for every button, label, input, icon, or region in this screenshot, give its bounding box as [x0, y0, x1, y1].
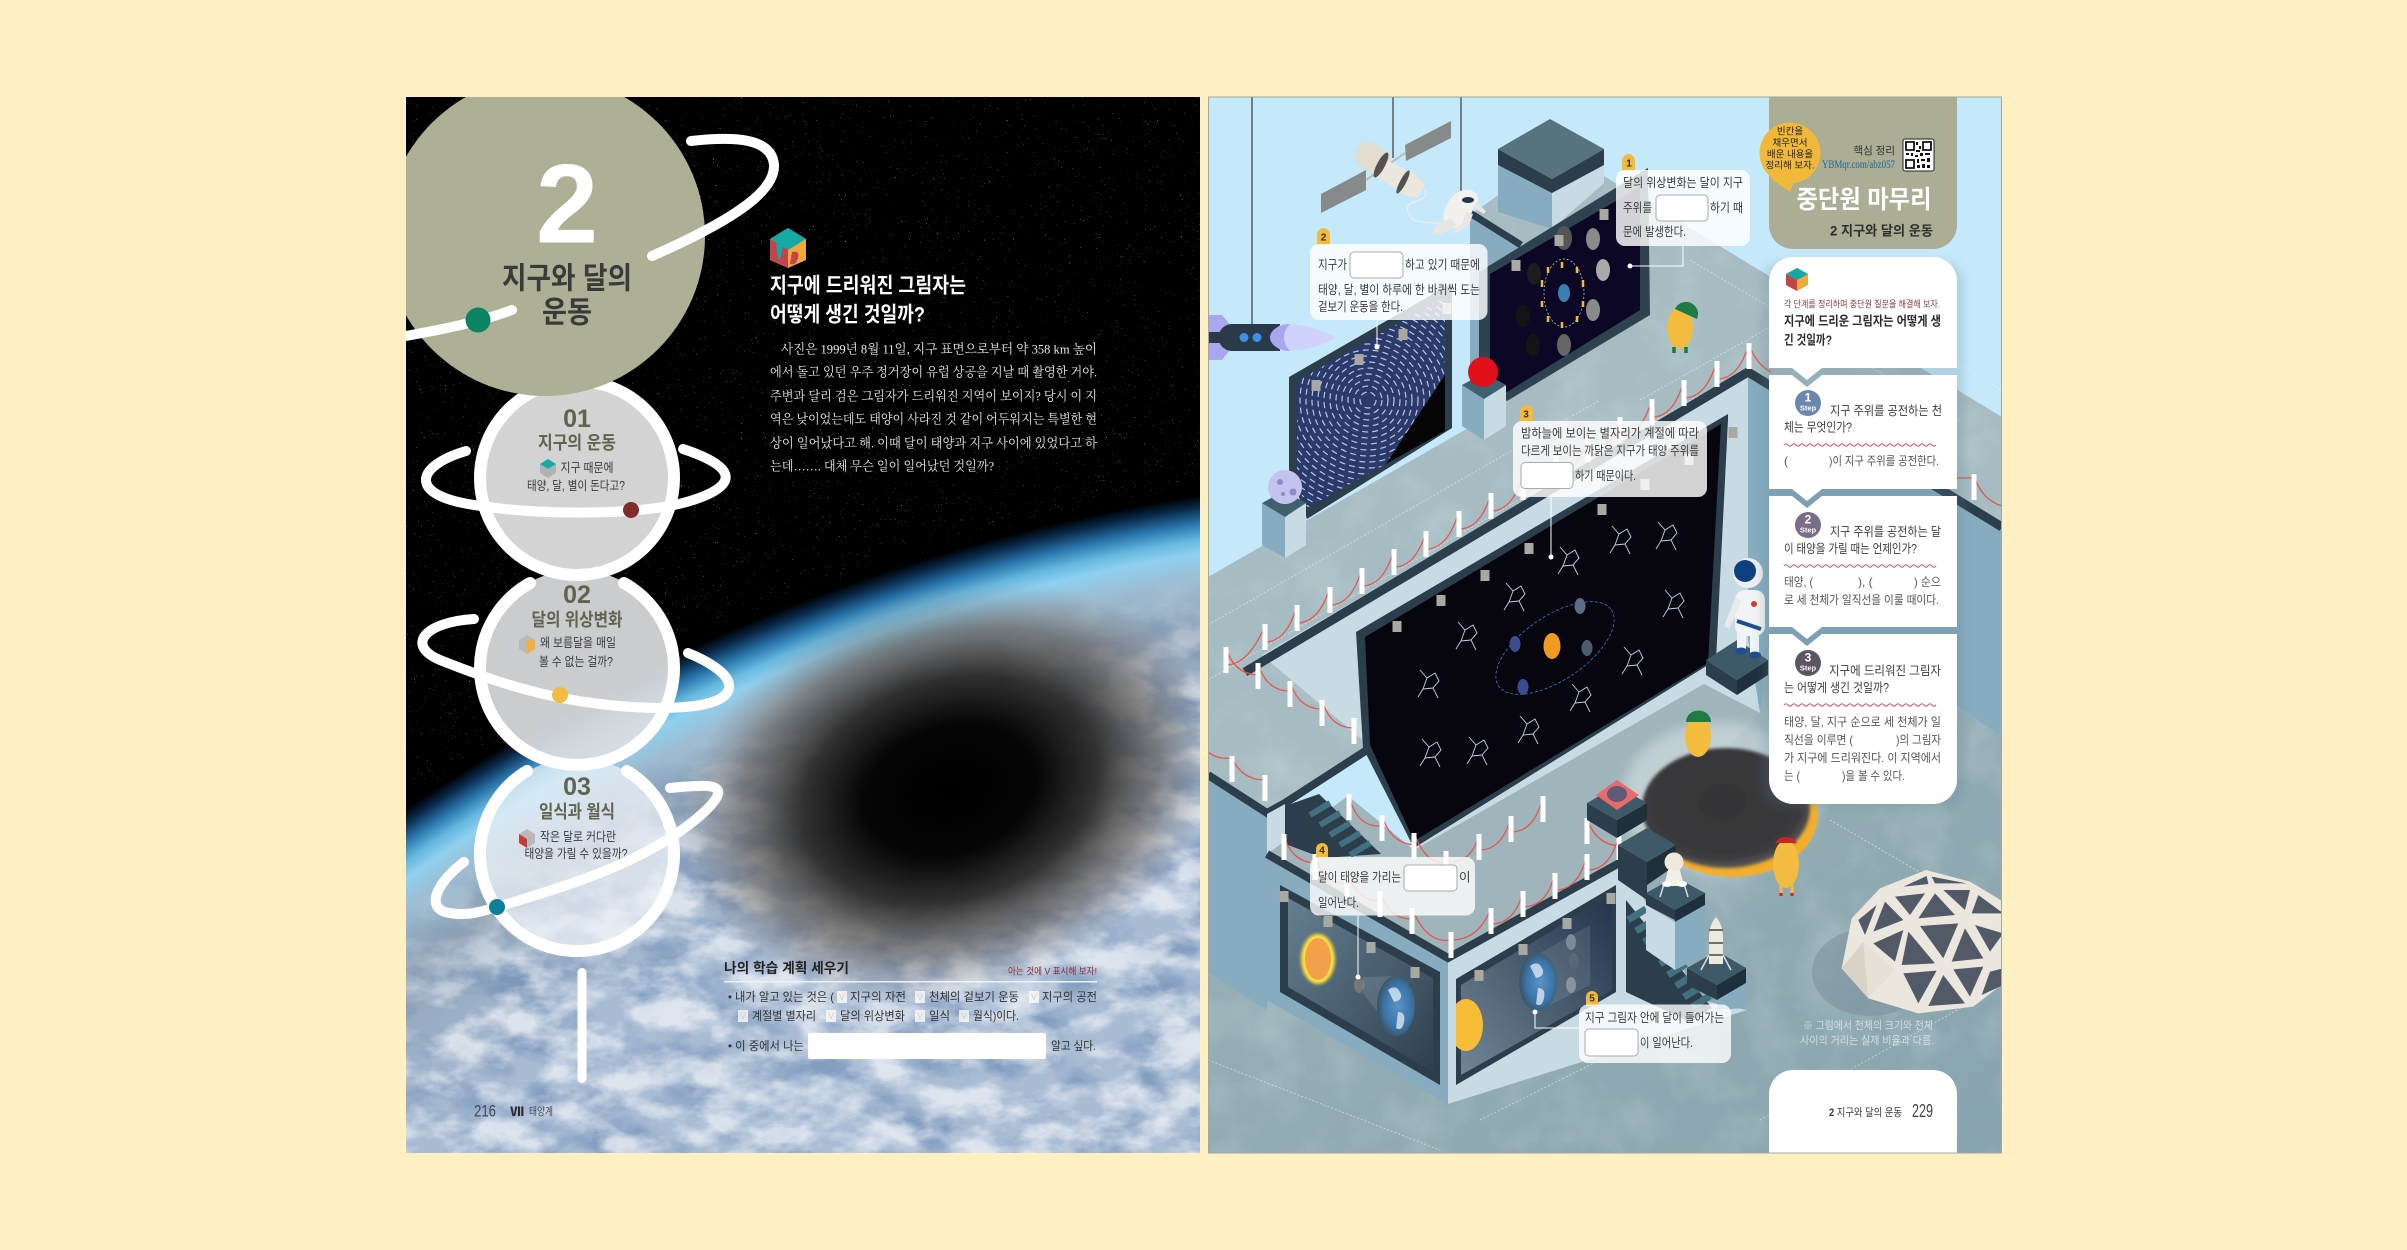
section 03 text: 태양을 가릴 수 있을까? [524, 847, 628, 861]
scale note: 사이의 거리는 실제 비율과 다름. [1800, 1034, 1934, 1047]
character green hat upper [1667, 302, 1698, 353]
headline question: 어떻게 생긴 것일까? [770, 304, 925, 326]
checklist row 1: V [917, 992, 923, 1002]
orbit ring 02 with dot [422, 619, 729, 708]
footer card with page number [1769, 1070, 1957, 1153]
black hole shadow model [1622, 722, 1818, 877]
character green hat lower [1685, 711, 1711, 757]
planet dot: green [466, 308, 490, 332]
star trail display [1246, 278, 1490, 522]
chapter title [502, 262, 632, 330]
moon circle 01 [480, 381, 674, 575]
lower left wall [1208, 748, 1370, 1010]
callout 4: 일어난다. [1318, 896, 1359, 910]
checklist row 2: V [961, 1011, 967, 1021]
step 2 panel: ), ( [1858, 575, 1873, 589]
checklist row 2: 계절별 별자리 [752, 1009, 816, 1023]
step 2 badge: 2 [1805, 512, 1812, 526]
speech bubble: 빈칸을 [1777, 126, 1803, 138]
ground floor [1208, 640, 2002, 1153]
intro paragraph: 는데……. 대체 무슨 일이 일어났던 것일까? [770, 458, 994, 474]
upper floor [1208, 176, 2002, 813]
small wall left of moon display [1470, 211, 1521, 405]
icon: cube 02 [519, 635, 535, 654]
section 03 text [524, 773, 628, 861]
chapter title: 지구와 달의 [502, 262, 632, 296]
rocket model small [1701, 917, 1731, 970]
lower right wall face [1448, 861, 1747, 1104]
step 2 panel [1769, 496, 1957, 639]
callout 4: 이 [1459, 870, 1471, 884]
section 03 text: 03 [563, 773, 591, 801]
wall edge strip [1245, 372, 2002, 672]
floating astronaut [1432, 184, 1486, 235]
standing astronaut [1724, 558, 1765, 658]
display wall light [1262, 372, 1760, 850]
astronaut statue on pedestal [1706, 558, 1768, 695]
icon: puzzle cube [770, 228, 806, 268]
rocket pedestal [1687, 917, 1746, 1010]
checklist row 2: 월식)이다. [973, 1009, 1019, 1023]
step 3 panel [1769, 634, 1957, 804]
step 3 panel: 태양, 달, 지구 순으로 세 천체가 일 [1784, 714, 1941, 729]
checklist row 2: V [740, 1011, 746, 1021]
learning plan box [724, 960, 1097, 1059]
callout 3: 하기 때문이다. [1575, 469, 1636, 483]
section 01 text: 태양, 달, 별이 돈다고? [527, 479, 625, 493]
callout 2: 하고 있기 때문에 [1405, 258, 1480, 272]
headline question [770, 274, 966, 326]
callout 1: 1 [1626, 158, 1632, 170]
step 1 badge: Step [1800, 404, 1817, 412]
right page border [1208, 97, 2002, 1153]
question card: 각 단계를 정리하며 중단원 질문을 해결해 보자. [1784, 298, 1940, 310]
callout 2 [1310, 228, 1488, 350]
step 3 badge [1795, 650, 1821, 676]
callout 2: 태양, 달, 별이 하루에 한 바퀴씩 도는 [1318, 283, 1480, 297]
page number left: 216 [474, 1102, 496, 1120]
lander pedestal [1646, 852, 1705, 970]
page number left: 태양계 [529, 1105, 553, 1118]
icon: cube 01 [540, 459, 556, 478]
step 3 badge: 3 [1805, 650, 1812, 664]
callout 5 [1532, 991, 1731, 1063]
callout 4: 4 [1319, 846, 1325, 856]
section 02 text: 02 [563, 581, 591, 609]
panel shadows [1762, 262, 1964, 807]
geodesic dome model [1812, 870, 2003, 1016]
orbit ring 03 with dot [436, 786, 718, 915]
box plinth top right [1498, 119, 1604, 229]
icon: cube 03 [519, 829, 535, 848]
right page: exhibition scene [1208, 97, 2003, 1153]
callout 3: 3 [1523, 410, 1529, 420]
orbit ring: chapter circle [400, 139, 774, 337]
checklist row 1: • 내가 알고 있는 것은 ( [728, 990, 834, 1004]
QR link label: 핵심 정리 [1853, 145, 1895, 157]
dark pillar [1618, 828, 1676, 900]
footer card with page number: 229 [1912, 1101, 1933, 1121]
section 02 text: 볼 수 없는 걸까? [539, 655, 613, 669]
photo: space and earth with moon shadow [406, 97, 1273, 1153]
step 3 panel: )을 볼 수 있다. [1842, 769, 1905, 783]
section 01 text [527, 405, 625, 493]
callout 5: 지구 그림자 안에 달이 들어가는 [1585, 1011, 1724, 1025]
answer row [728, 1033, 1096, 1059]
callout 4: 달이 태양을 가리는 [1318, 870, 1401, 884]
step 1 panel [1769, 375, 1957, 501]
question card: 긴 것일까? [1784, 332, 1832, 348]
moon circle 02 [480, 570, 674, 765]
answer row: 알고 싶다. [1051, 1039, 1096, 1053]
character red cap [1773, 837, 1799, 896]
step 1 badge: 1 [1805, 390, 1812, 404]
callout 2: 지구가 [1318, 258, 1347, 272]
lower floor mezzanine [1267, 684, 1760, 958]
icon: small puzzle cube [1786, 268, 1808, 291]
checklist row 1: V [1031, 992, 1037, 1002]
footer card with page number: 2 지구와 달의 운동 [1829, 1106, 1902, 1119]
callout 2: 2 [1321, 232, 1327, 244]
header tab [1769, 97, 1957, 249]
question card: 지구에 드리운 그림자는 어떻게 생 [1784, 314, 1941, 328]
page number left [474, 1105, 552, 1116]
section 02 text [532, 581, 623, 669]
callout 3: 다르게 보이는 까닭은 지구가 태양 주위를 [1521, 444, 1699, 458]
textbook spread [406, 96, 2002, 1154]
constellations [1418, 522, 1684, 767]
moon circle 03 [480, 758, 674, 952]
moon phases ring [1516, 226, 1610, 356]
orbit diagram [1481, 583, 1629, 713]
checklist row 2: 일식 [929, 1009, 950, 1023]
sky background [1209, 98, 2001, 848]
section 02 text: 달의 위상변화 [532, 610, 623, 630]
chapter number: 2 [536, 142, 598, 266]
checklist row 1: V [839, 992, 845, 1002]
section 03 text: 작은 달로 커다란 [540, 830, 616, 844]
QR link label [1822, 145, 1895, 171]
intro paragraph [770, 342, 1097, 474]
intro paragraph: 에서 돌고 있던 우주 정거장이 유럽 상공을 지날 때 촬영한 거야. [770, 364, 1097, 380]
moon phase display [1479, 168, 1650, 401]
callout 1: 주위를 [1623, 201, 1652, 215]
learning plan box: 나의 학습 계획 세우기 [724, 960, 849, 976]
step 2 badge [1795, 512, 1821, 538]
step 2 panel: 로 세 천체가 일직선을 이룰 때이다. [1784, 592, 1939, 607]
speech bubble: 정리해 보자. [1766, 160, 1814, 172]
moon ball on pedestal (red) [1462, 357, 1506, 440]
intro paragraph: 역은 낮이었는데도 태양이 사라진 것 같이 어두워지는 특별한 현 [770, 412, 1097, 426]
intro paragraph: 주변과 달리 검은 그림자가 드리워진 지역이 보이지? 당시 이 지 [770, 388, 1097, 404]
big chapter circle [406, 97, 705, 396]
step 1 badge [1795, 390, 1821, 416]
step 3 panel: )의 그림자 [1896, 733, 1941, 747]
step 1 panel: 체는 무엇인가? [1784, 420, 1852, 434]
speech bubble [1760, 122, 1820, 192]
checklist row 1: 지구의 공전 [1042, 990, 1097, 1004]
step 2 panel: 지구 주위를 공전하는 달 [1830, 525, 1941, 539]
callout 1: 문에 발생한다. [1623, 225, 1686, 239]
step 3 panel: 는 어떻게 생긴 것일까? [1784, 681, 1889, 695]
section 02 text: 왜 보름달을 매일 [540, 636, 616, 650]
step 2 panel: ) 순으 [1914, 575, 1941, 589]
intro paragraph: 사진은 1999년 8월 11일, 지구 표면으로부터 약 358 km 높이 [781, 342, 1097, 356]
speech bubble: 배운 내용을 [1767, 150, 1813, 160]
checklist row 1 [728, 990, 1096, 1004]
floor marble texture [1209, 342, 2001, 1152]
speech bubble: 채우면서 [1773, 138, 1807, 149]
callout 2: 겉보기 운동을 한다. [1318, 300, 1403, 314]
big constellation display [1356, 414, 1728, 848]
checklist row 2: V [917, 1011, 923, 1021]
checklist row 2: V [828, 1011, 834, 1021]
crystal pedestal [1587, 780, 1647, 838]
rocket model [1208, 315, 1336, 360]
callout 1 [1616, 154, 1750, 268]
checklist row 1: 지구의 자전 [850, 990, 906, 1004]
back wall right [1748, 372, 2002, 737]
section review title: 중단원 마무리 [1796, 186, 1932, 214]
icon: QR code [1903, 139, 1934, 171]
learning plan box: 아는 것에 V 표시해 보자! [1008, 966, 1097, 978]
vertical timeline bar [578, 968, 586, 1083]
step 2 panel: 태양, ( [1784, 575, 1813, 589]
lower stairs [1626, 900, 1712, 1022]
callout 5: 이 일어난다. [1640, 1036, 1693, 1050]
floor grid lines [1208, 255, 2002, 1150]
callout 3: 밤하늘에 보이는 별자리가 계절에 따라 [1521, 426, 1699, 440]
section 01 text: 지구의 운동 [538, 433, 616, 453]
hanging wires [1252, 97, 1461, 324]
solar eclipse panel [1280, 885, 1440, 1085]
review subtitle: 2 지구와 달의 운동 [1830, 224, 1933, 238]
step 3 panel: 지구에 드리워진 그림자 [1829, 664, 1941, 678]
section 01 text: 01 [563, 405, 591, 433]
lunar lander [1660, 852, 1688, 897]
headline question: 지구에 드리워진 그림자는 [770, 274, 966, 298]
callout 3 [1513, 405, 1707, 560]
QR link label: YBMqr.com/abz057 [1822, 159, 1895, 171]
callout 1: 달의 위상변화는 달이 지구 [1623, 176, 1743, 190]
space station model [1321, 121, 1451, 225]
step 3 panel: 직선을 이루면 ( [1784, 733, 1853, 747]
lunar eclipse panel [1449, 885, 1616, 1085]
step 3 panel: 가 지구에 드리워진다. 이 지역에서 [1784, 751, 1941, 765]
mezzanine edge strip [1267, 854, 1623, 958]
step 3 panel: 는 ( [1784, 769, 1800, 783]
orbit ring 01 with dot [426, 449, 726, 518]
step 2 badge: Step [1800, 526, 1817, 534]
callout 1: 하기 때 [1710, 201, 1743, 215]
step 3 badge: Step [1800, 664, 1817, 672]
spotlight cans [1284, 209, 1733, 981]
upper stairs [1285, 794, 1381, 858]
section 03 text: 일식과 월식 [539, 802, 615, 822]
intro paragraph: 상이 일어났다고 해. 이때 달이 태양과 지구 사이에 있었다고 하 [770, 436, 1097, 450]
step 1 panel: )이 지구 주위를 공전한다. [1829, 454, 1939, 468]
purple moon on pedestal [1262, 470, 1306, 558]
chapter title: 운동 [542, 296, 592, 330]
rope barriers [1208, 343, 2002, 958]
answer row: • 이 중에서 나는 [728, 1039, 804, 1053]
callout 5: 5 [1589, 994, 1595, 1004]
scale note: ※ 그림에서 천체의 크기와 천체 [1803, 1018, 1933, 1032]
checklist row 1: 천체의 겉보기 운동 [929, 989, 1019, 1004]
step 2 panel: 이 태양을 가릴 때는 언제인가? [1784, 542, 1917, 556]
step 1 panel: 지구 주위를 공전하는 천 [1830, 403, 1942, 418]
section 01 text: 지구 때문에 [560, 461, 614, 475]
scale note [1800, 1018, 1934, 1047]
page number left: Ⅶ [510, 1105, 524, 1119]
step 1 panel: ( [1784, 454, 1788, 468]
left page: chapter opener [406, 97, 1200, 1153]
question card [1769, 257, 1957, 380]
callout 4 [1310, 843, 1475, 980]
checklist row 2: 달의 위상변화 [840, 1009, 905, 1023]
lower left wall face [1267, 854, 1448, 1104]
checklist row 2 [738, 1009, 1019, 1023]
